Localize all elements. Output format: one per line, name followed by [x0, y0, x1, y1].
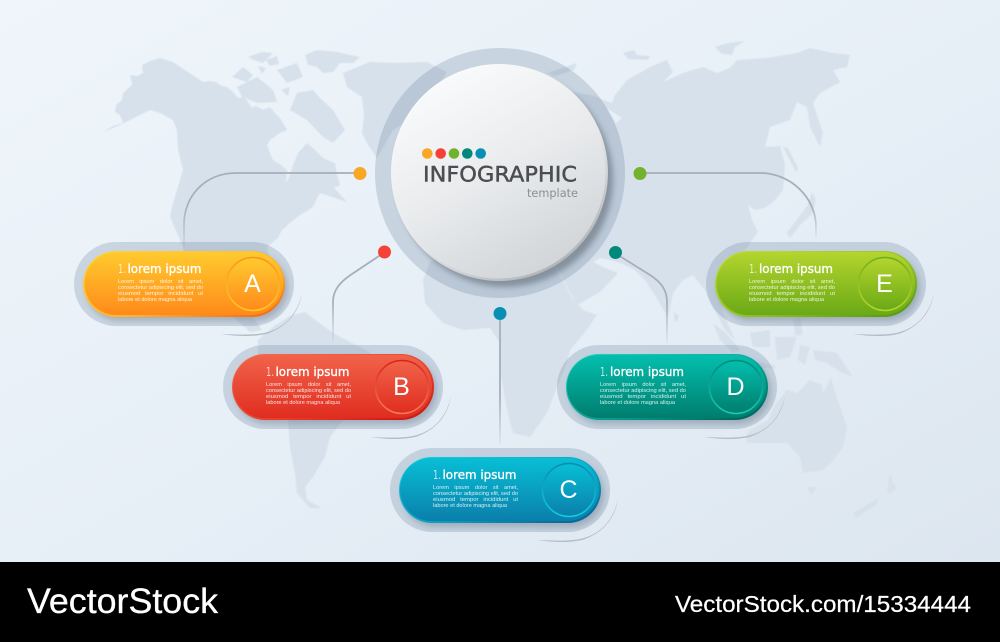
map: New Guinea: [813, 350, 853, 377]
circle rim: [391, 64, 608, 281]
number: 1.: [749, 262, 757, 276]
map: New Zealand: [853, 473, 897, 518]
body text: eiusmod tempor incididunt ut: [433, 497, 518, 503]
body text: Lorem ipsum dolor sit amet,: [600, 382, 686, 388]
shadow: [569, 358, 771, 424]
halo: [390, 448, 610, 532]
map: Australia: [746, 378, 847, 473]
body text: Lorem ipsum dolor sit amet,: [433, 485, 518, 491]
card D: [557, 345, 785, 439]
swoosh: [853, 293, 934, 336]
body text: consectetur adipiscing elit, sed do: [118, 285, 203, 291]
map: Madagascar: [566, 368, 578, 398]
shadow: [402, 461, 604, 527]
body text: labore et dolore magna aliqua: [600, 400, 676, 406]
swoosh: [704, 396, 785, 439]
letter: D: [726, 373, 745, 401]
pill body: [84, 252, 283, 315]
number: 1.: [266, 365, 274, 379]
swoosh: [370, 396, 451, 439]
circle halo: [375, 48, 625, 298]
body text: eiusmod tempor incididunt ut: [749, 291, 835, 297]
body text: labore et dolore magna aliqua: [433, 503, 508, 509]
connector E: [634, 167, 816, 238]
connector C: [494, 307, 506, 445]
circle shadow: [397, 71, 613, 287]
halo: [223, 345, 443, 429]
number: 1.: [433, 468, 441, 482]
letter: C: [559, 476, 578, 504]
body text: eiusmod tempor incididunt ut: [600, 394, 686, 400]
halo: [557, 345, 777, 429]
letter: E: [876, 270, 893, 298]
halo: [74, 242, 294, 326]
pill: [715, 251, 917, 317]
body text: labore et dolore magna aliqua: [749, 297, 825, 303]
ring: [376, 360, 428, 414]
footer url: VectorStock.com/15334444: [675, 591, 971, 617]
map: Greenland: [343, 62, 447, 158]
body text: labore et dolore magna aliqua: [118, 297, 193, 303]
map: Tasmania: [807, 487, 817, 496]
number: 1.: [600, 365, 608, 379]
heading: lorem ipsum: [759, 262, 833, 276]
connector A: [184, 167, 366, 250]
heading: lorem ipsum: [276, 365, 350, 379]
shadow: [235, 358, 437, 424]
logo colour dots: [422, 148, 486, 159]
body text: [433, 485, 518, 509]
map: North America: [103, 58, 347, 332]
ring: [226, 258, 280, 310]
heading: lorem ipsum: [442, 468, 516, 482]
body text: [266, 382, 351, 406]
halo: [706, 242, 926, 326]
card E: [706, 242, 934, 336]
swoosh: [537, 499, 618, 542]
body text: Lorem ipsum dolor sit amet,: [266, 382, 351, 388]
body text: [749, 279, 835, 303]
ring: [542, 464, 596, 516]
connector B: [333, 246, 391, 343]
body text: consectetur adipiscing elit, sed do: [266, 388, 351, 394]
card C: [390, 448, 618, 542]
map: Sakhalin: [783, 147, 798, 172]
letter: A: [244, 270, 261, 298]
pill: [566, 354, 768, 420]
circle face: [392, 66, 606, 278]
card B: [223, 345, 451, 439]
map: South America: [258, 312, 375, 508]
number: 1.: [118, 262, 126, 276]
map: Canadian arctic islands: [232, 50, 360, 143]
heading: lorem ipsum: [128, 262, 202, 276]
map: Eurasia: [450, 48, 850, 340]
body text: labore et dolore magna aliqua: [266, 400, 341, 406]
footer brand: VectorStock: [27, 582, 219, 621]
body text: eiusmod tempor incididunt ut: [118, 291, 203, 297]
pill body: [567, 355, 766, 418]
center circle: [375, 48, 625, 298]
body text: Lorem ipsum dolor sit amet,: [118, 279, 203, 285]
footer bar: [0, 562, 1000, 642]
heading: lorem ipsum: [610, 365, 684, 379]
shadow: [718, 255, 920, 321]
world map: [103, 41, 897, 518]
pill body: [400, 458, 599, 521]
body text: [600, 382, 686, 406]
pill body: [716, 252, 915, 315]
body text: Lorem ipsum dolor sit amet,: [749, 279, 835, 285]
map: arctic islands north of Eurasia: [547, 41, 745, 76]
connector D: [609, 246, 667, 343]
body text: [118, 279, 203, 303]
body text: consectetur adipiscing elit, sed do: [600, 388, 686, 394]
body text: consectetur adipiscing elit, sed do: [433, 491, 518, 497]
pill body: [233, 355, 432, 418]
map: Japan: [787, 192, 816, 238]
shadow: [86, 255, 288, 321]
card A: [74, 242, 302, 336]
letter: B: [393, 373, 410, 401]
map: Sri Lanka: [674, 312, 679, 322]
swoosh: [221, 293, 302, 336]
pill: [83, 251, 285, 317]
map: Indonesia and Philippines: [713, 318, 810, 369]
body text: consectetur adipiscing elit, sed do: [749, 285, 835, 291]
map: Africa: [423, 250, 597, 437]
title: INFOGRAPHIC: [423, 162, 577, 188]
pill: [232, 354, 434, 420]
ring: [710, 360, 762, 414]
body text: eiusmod tempor incididunt ut: [266, 394, 351, 400]
subtitle: template: [527, 186, 578, 200]
pill: [399, 457, 601, 523]
ring: [858, 258, 912, 310]
